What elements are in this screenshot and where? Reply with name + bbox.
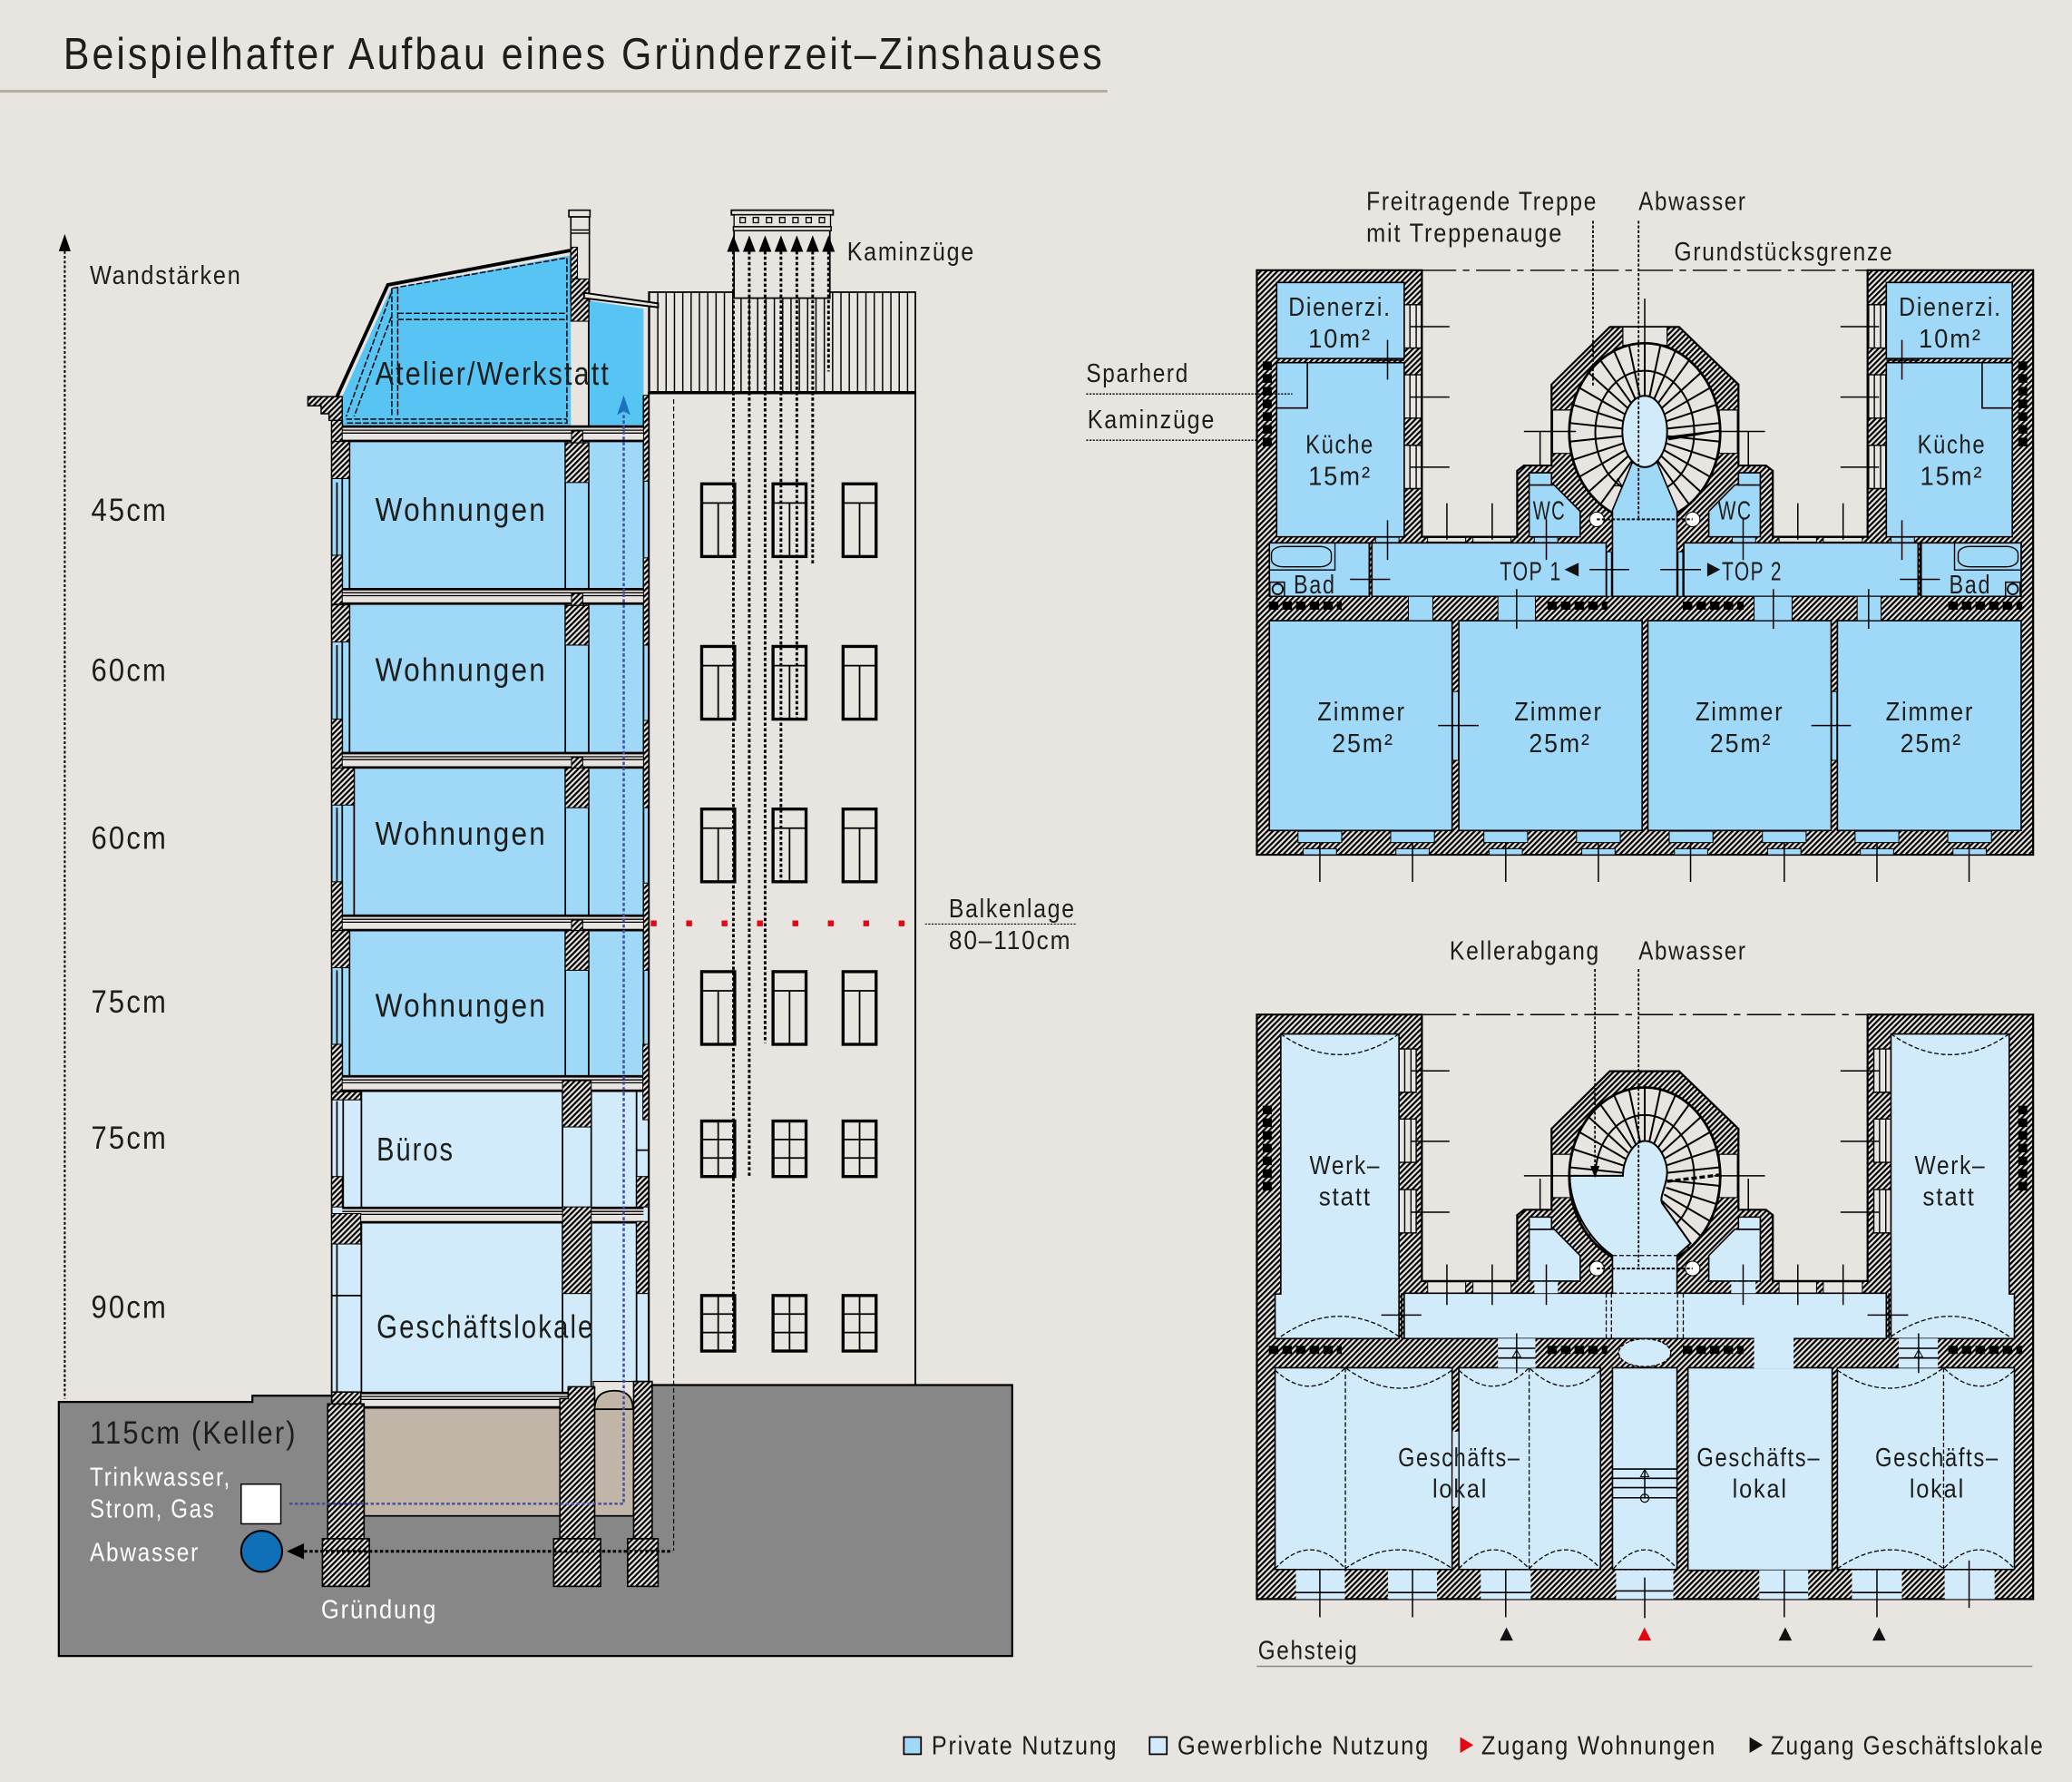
hatched masonry	[332, 396, 649, 1294]
section labels: Gründung	[321, 1595, 437, 1624]
cellar room	[364, 1408, 633, 1516]
title: Beispielhafter Aufbau eines Gründerzeit–Zinshauses	[64, 29, 1105, 79]
section labels: 75cm	[92, 1121, 168, 1156]
atelier roof structure	[308, 211, 658, 423]
wall lines	[332, 301, 649, 1394]
stair	[1569, 343, 1720, 596]
ground plan labels: Geschäfts–	[1398, 1444, 1521, 1473]
upper plan labels: Küche	[1305, 431, 1374, 460]
drain circles	[1589, 1261, 1700, 1276]
rooms	[1269, 282, 2021, 830]
section labels: 45cm	[92, 493, 168, 528]
upper plan labels: WC	[1718, 497, 1752, 526]
street windows	[1298, 831, 1991, 855]
section labels: Strom, Gas	[90, 1495, 215, 1524]
ground plan labels: Geschäfts–	[1875, 1444, 1999, 1473]
facade wall	[649, 393, 915, 1386]
panel: upper floor plan	[1086, 188, 2033, 882]
stair windows	[1552, 327, 1737, 454]
cellar arch	[593, 1382, 634, 1409]
upper plan labels: 15m²	[1308, 463, 1372, 492]
entrance arrows	[1500, 1628, 1886, 1640]
dimension ticks	[1320, 1071, 1969, 1618]
legend: Gewerbliche Nutzung	[1178, 1731, 1430, 1760]
plan outline masonry	[1256, 1014, 2033, 1599]
panel: ground floor plan	[1256, 937, 2033, 1667]
upper plan labels: 25m²	[1901, 729, 1962, 759]
upper plan labels: Zimmer	[1317, 698, 1406, 727]
section labels: 90cm	[92, 1290, 168, 1326]
upper plan labels: Abwasser	[1638, 188, 1747, 217]
ground	[59, 1385, 1012, 1656]
section labels: 60cm	[92, 652, 168, 688]
upper plan labels: TOP 2	[1722, 558, 1783, 587]
upper plan labels: 25m²	[1710, 729, 1772, 759]
section labels: Geschäftslokale	[376, 1307, 594, 1345]
section labels: 80–110cm	[949, 926, 1071, 955]
upper plan labels	[1086, 188, 2002, 759]
dashed roof framing	[347, 258, 567, 423]
cornice	[308, 397, 342, 420]
section floors	[332, 255, 649, 1409]
landing side lines	[1612, 1255, 1677, 1293]
upper plan labels: Zimmer	[1514, 698, 1603, 727]
section labels: Abwasser	[90, 1539, 200, 1568]
corridor wall windows	[1428, 1282, 1862, 1293]
upper plan labels: mit Treppenauge	[1366, 220, 1563, 249]
leader: stairs and wastewater	[1593, 220, 1638, 518]
ground plan labels: Kellerabgang	[1450, 937, 1600, 966]
section labels: 75cm	[92, 984, 168, 1020]
basement	[241, 396, 672, 1586]
bathtubs	[1269, 543, 2021, 596]
section labels: Wohnungen	[376, 491, 547, 528]
leader: cellar stairs and wastewater	[1590, 969, 1638, 1267]
dimension ticks	[1320, 299, 1969, 882]
title underline	[0, 90, 1108, 93]
drain circles	[1589, 512, 1700, 526]
flue rows	[1269, 602, 2022, 610]
upper plan labels: 10m²	[1308, 325, 1372, 354]
ground plan labels: lokal	[1910, 1475, 1965, 1504]
eaves line	[649, 392, 915, 394]
upper plan labels: Bad	[1950, 571, 1991, 600]
side windows	[1399, 1049, 1891, 1233]
upper plan labels: Freitragende Treppe	[1366, 188, 1598, 217]
wastewater line and arrow	[287, 1543, 672, 1559]
windows	[701, 484, 876, 1351]
chimney flue lines with arrows	[727, 235, 835, 1351]
upper plan labels: Kaminzüge	[1088, 406, 1216, 435]
ground plan labels: lokal	[1733, 1475, 1788, 1504]
beam level leader	[925, 923, 1077, 925]
foundation walls	[322, 1382, 658, 1586]
sidewalk line	[1256, 1666, 2032, 1668]
supply line and arrow	[289, 396, 630, 1503]
section labels: Wohnungen	[376, 815, 547, 852]
upper plan labels: TOP 1	[1500, 558, 1562, 587]
ground plan labels: lokal	[1432, 1475, 1488, 1504]
chimney stack	[731, 211, 833, 299]
legend	[904, 1731, 2044, 1760]
upper plan labels: Bad	[1294, 571, 1336, 600]
property line	[1422, 1013, 1867, 1015]
plan outline masonry	[1256, 270, 2033, 855]
TOP arrows	[1565, 563, 1720, 576]
upper plan labels: Sparherd	[1086, 359, 1189, 388]
ground plan labels	[1258, 937, 1999, 1666]
upper plan labels: 15m²	[1920, 463, 1983, 492]
hearth flue blocks	[1267, 361, 2023, 447]
section labels: Atelier/Werkstatt	[376, 355, 611, 392]
section labels: Wohnungen	[376, 986, 547, 1023]
section labels: 115cm (Keller)	[90, 1415, 298, 1451]
private floors fill	[332, 426, 649, 1076]
upper plan labels: Dienerzi.	[1288, 293, 1392, 322]
flue rows	[1269, 1346, 2022, 1354]
roof with vertical seams	[649, 292, 915, 392]
commercial floors fill	[332, 1076, 649, 1394]
stair newel	[1640, 1494, 1649, 1503]
section labels: 60cm	[92, 820, 168, 856]
openings	[1296, 1282, 1995, 1599]
step arrows	[1512, 1350, 1922, 1477]
section labels	[90, 238, 1076, 1624]
atelier fill	[342, 255, 643, 426]
stair windows	[1552, 1154, 1737, 1198]
red beam level markers	[650, 921, 906, 925]
stair	[1569, 1088, 1720, 1266]
upper plan labels: 10m²	[1919, 325, 1982, 354]
upper plan labels: Zimmer	[1886, 698, 1974, 727]
supply box	[241, 1484, 281, 1523]
upper plan labels: 25m²	[1529, 729, 1591, 759]
upper plan labels: Dienerzi.	[1899, 293, 2002, 322]
legend: Private Nutzung	[932, 1731, 1118, 1760]
section labels: Kaminzüge	[847, 238, 975, 267]
courtyard side windows	[1404, 305, 1886, 489]
stair foot landing	[1612, 1255, 1677, 1294]
flue blocks	[1267, 1106, 2023, 1192]
ground plan labels: Abwasser	[1638, 937, 1747, 966]
ground plan labels: Werk–	[1915, 1151, 1986, 1180]
sparherd corners	[1276, 363, 2012, 408]
entry ellipse	[1618, 1339, 1671, 1366]
ground plan labels: Geschäfts–	[1696, 1444, 1821, 1473]
vault arcs and dashed lines	[1275, 1034, 2015, 1570]
ground plan labels: Werk–	[1310, 1151, 1381, 1180]
section labels: Büros	[376, 1131, 454, 1168]
corridor wall strips	[1428, 538, 1862, 542]
door openings	[1375, 537, 1914, 760]
roof outline	[337, 250, 573, 397]
upper plan labels: Grundstücksgrenze	[1675, 238, 1893, 267]
floor slabs	[342, 426, 643, 1409]
panel: building section and facade	[59, 211, 1012, 1656]
service chimney	[569, 211, 590, 321]
wastewater riser	[673, 399, 675, 1551]
ground plan labels: Gehsteig	[1258, 1636, 1358, 1666]
door steps	[1296, 1348, 1938, 1592]
property line	[1422, 269, 1867, 271]
rooms	[1275, 1034, 2015, 1571]
gutter	[584, 293, 658, 308]
section labels: Wandstärken	[90, 261, 242, 290]
upper plan labels: 25m²	[1332, 729, 1394, 759]
section labels: Balkenlage	[949, 895, 1076, 924]
leader: Sparherd and Kaminzüge	[1086, 394, 1293, 440]
upper plan labels: Zimmer	[1696, 698, 1784, 727]
section labels: Trinkwasser,	[90, 1464, 231, 1493]
section labels: Wohnungen	[376, 651, 547, 688]
upper plan labels: Küche	[1918, 431, 1986, 460]
upper plan labels: WC	[1533, 497, 1566, 526]
ground plan labels: statt	[1922, 1183, 1976, 1212]
legend: Zugang Wohnungen	[1481, 1731, 1716, 1760]
ground plan labels: statt	[1319, 1183, 1372, 1212]
wall thickness arrow	[59, 234, 71, 1398]
wastewater circle	[241, 1531, 282, 1571]
